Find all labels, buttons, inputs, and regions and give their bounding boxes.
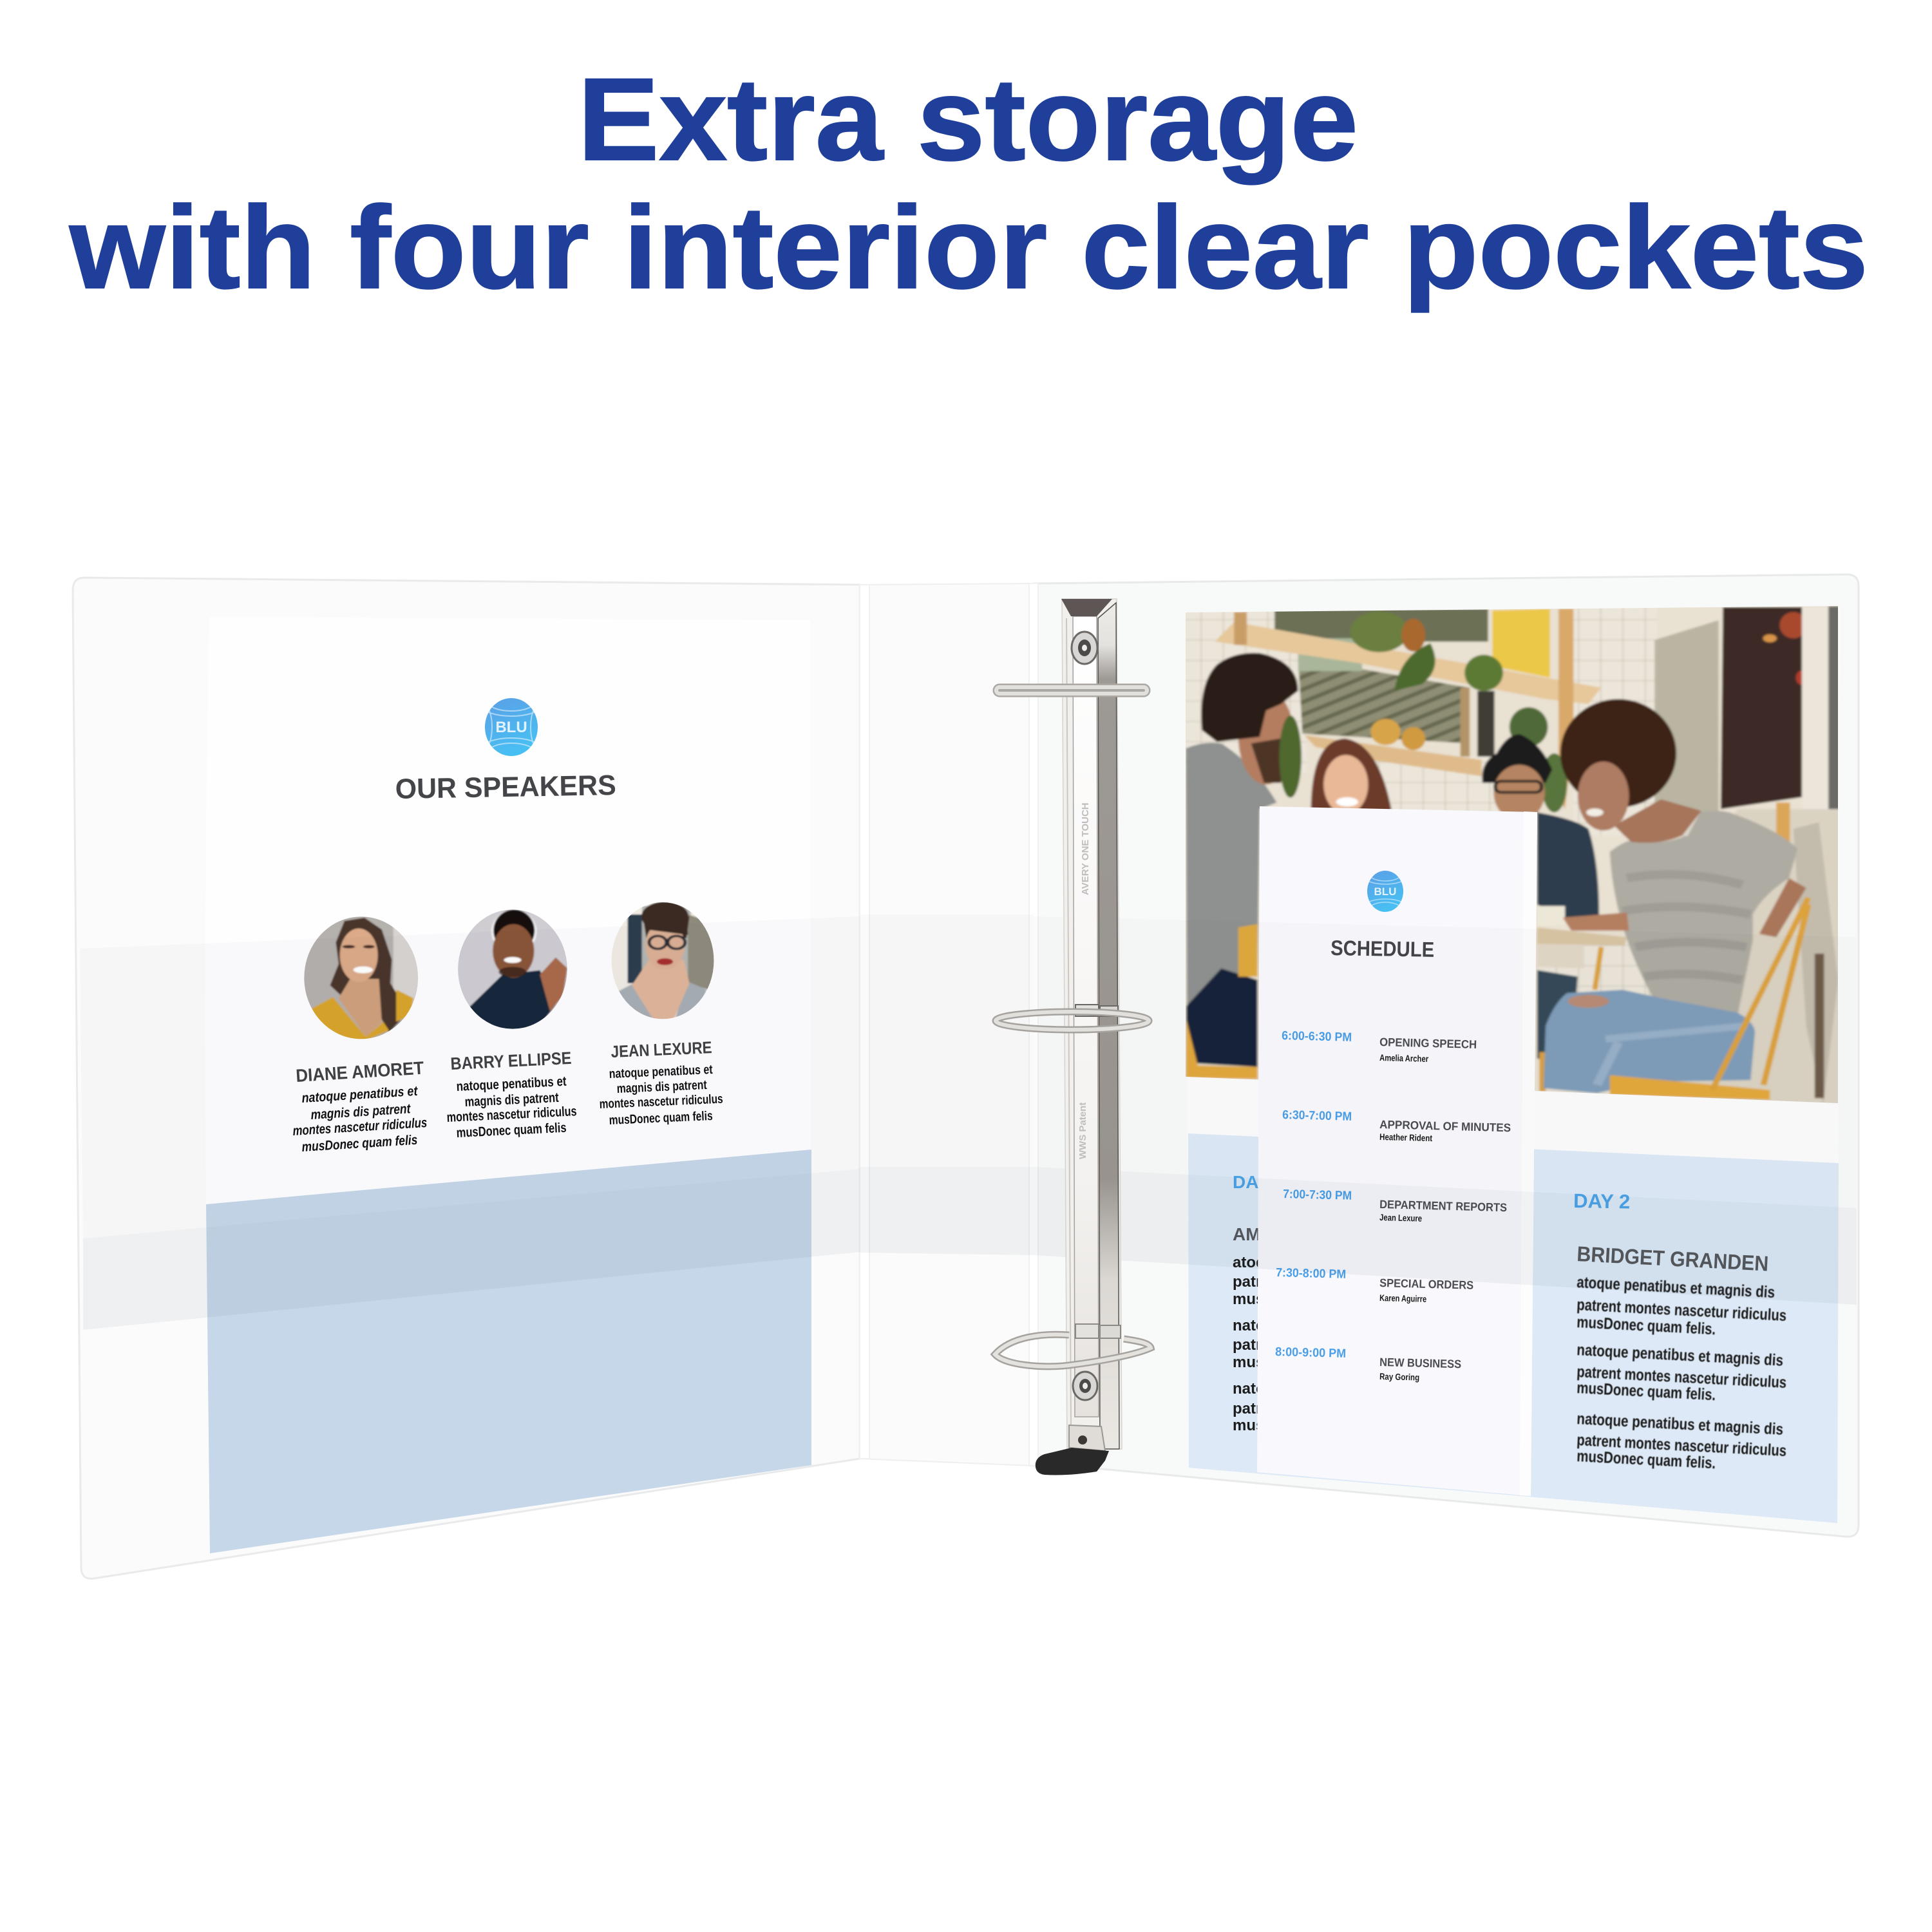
screw top	[1072, 632, 1097, 664]
blue footer panel	[1188, 1133, 1839, 1523]
photo: Diane	[301, 914, 422, 1043]
speaker: Diane Amoret: magnis dis patrent	[310, 1101, 412, 1122]
schedule sessions: SPECIAL ORDERS	[1379, 1276, 1473, 1292]
pocket seams	[860, 583, 1038, 1466]
Day 2 column	[1573, 1189, 1787, 1472]
rail imprint: AVERY ONE TOUCH	[1080, 802, 1091, 895]
left man	[1186, 743, 1276, 1008]
binder	[73, 574, 1862, 1578]
panel: right cover	[1034, 574, 1859, 1537]
card paper	[1257, 806, 1537, 1496]
Day 1 column: DA	[1233, 1172, 1258, 1192]
speaker: Diane Amoret	[292, 1058, 428, 1155]
Day 1 column: patr	[1233, 1336, 1262, 1354]
Day 2 column: natoque penatibus et magnis dis	[1577, 1341, 1784, 1370]
speaker: Jean Lexure: natoque penatibus et	[609, 1063, 713, 1081]
photo: Jean	[612, 902, 714, 1019]
speaker: Barry Ellipse: musDonec quam felis	[456, 1121, 567, 1141]
rail imprint	[1077, 802, 1091, 1159]
schedule sessions: OPENING SPEECH	[1379, 1036, 1477, 1051]
center woman	[1311, 739, 1392, 813]
infographic canvas	[68, 79, 1864, 1580]
speaker: Jean Lexure: musDonec quam felis	[609, 1109, 713, 1128]
clear pocket overlays	[80, 914, 1857, 1330]
schedule sessions: DEPARTMENT REPORTS	[1379, 1198, 1507, 1214]
heading: schedule: SCHEDULE	[1331, 936, 1434, 961]
schedule times: 7:30-8:00 PM	[1276, 1266, 1346, 1282]
lever bracket	[1069, 1425, 1105, 1451]
rail channel	[1073, 616, 1099, 1417]
card edge	[1520, 811, 1537, 1496]
sheet paper	[1186, 606, 1840, 1523]
schedule times: 7:00-7:30 PM	[1283, 1188, 1352, 1203]
speaker: Barry Ellipse: magnis dis patrent	[464, 1090, 559, 1110]
Day 2 column: musDonec quam felis.	[1577, 1447, 1716, 1472]
schedule times: 8:00-9:00 PM	[1275, 1345, 1346, 1361]
Day 2 column: patrent montes nascetur ridiculus	[1577, 1431, 1787, 1460]
Day 2 column: patrent montes nascetur ridiculus	[1577, 1296, 1787, 1325]
schedule presenters: Karen Aguirre	[1379, 1293, 1426, 1304]
ring mechanism	[995, 599, 1151, 1475]
speaker: Diane Amoret: DIANE AMORET	[295, 1058, 424, 1086]
ring middle	[996, 1005, 1149, 1030]
speaker: Diane Amoret: natoque penatibus et	[301, 1084, 419, 1106]
schedule sessions: APPROVAL OF MINUTES	[1379, 1118, 1511, 1134]
title: with four interior clear pockets	[69, 182, 1868, 313]
rail plate	[1062, 599, 1122, 1449]
schedule presenters	[1379, 1052, 1433, 1383]
logo: BLU: BLU	[1374, 886, 1396, 898]
ring bottom	[995, 1324, 1151, 1367]
speaker: Barry Ellipse	[446, 1048, 577, 1141]
schedule presenters: Amelia Archer	[1379, 1052, 1429, 1064]
Day 2 column: patrent montes nascetur ridiculus	[1577, 1363, 1787, 1392]
schedule times: 6:30-7:00 PM	[1282, 1108, 1352, 1124]
screw bottom	[1073, 1372, 1097, 1400]
Day 2 column: natoque penatibus et magnis dis	[1577, 1410, 1784, 1439]
schedule card	[1257, 806, 1537, 1496]
speaker: Jean Lexure: magnis dis patrent	[616, 1078, 707, 1096]
blue footer panel	[206, 1150, 811, 1553]
speaker: Jean Lexure: JEAN LEXURE	[611, 1037, 712, 1061]
schedule sessions	[1379, 1036, 1511, 1370]
panel: spine	[860, 583, 1034, 1466]
ring top	[996, 687, 1147, 694]
photo: Barry	[458, 909, 567, 1029]
right woman	[1610, 811, 1797, 1014]
heading: our speakers: OUR SPEAKERS	[395, 770, 616, 805]
speaker: Barry Ellipse: natoque penatibus et	[456, 1074, 567, 1094]
panel: left cover	[73, 578, 860, 1578]
rail dark side	[1098, 603, 1119, 1449]
rail imprint: WWS Patent	[1077, 1103, 1088, 1159]
Day 2 column: BRIDGET GRANDEN	[1577, 1242, 1769, 1276]
speaker: Jean Lexure	[599, 1037, 723, 1128]
speaker: Diane Amoret: musDonec quam felis	[301, 1133, 418, 1155]
Day 2 column: DAY 2	[1573, 1189, 1630, 1213]
Day 1 column: nato	[1233, 1317, 1265, 1334]
Day 1 column: mus	[1233, 1291, 1264, 1308]
Day 2 column: atoque penatibus et magnis dis	[1577, 1273, 1776, 1302]
Day 1 column: patr	[1233, 1273, 1262, 1291]
schedule sessions: NEW BUSINESS	[1379, 1356, 1461, 1370]
rail top cap	[1061, 599, 1112, 616]
Day 1 column: mus	[1233, 1417, 1264, 1434]
speaker: Jean Lexure: montes nascetur ridiculus	[599, 1092, 723, 1112]
speaker: Barry Ellipse: BARRY ELLIPSE	[450, 1048, 572, 1074]
Day 1 column	[1233, 1172, 1265, 1434]
left sheet: our speakers	[205, 617, 811, 1553]
photo: cafe scene	[1179, 599, 1862, 1124]
title: Extra storage	[578, 53, 1358, 185]
rail flange line	[1066, 618, 1071, 1426]
Day 1 column: AM	[1233, 1224, 1261, 1244]
hat man	[1537, 813, 1599, 919]
schedule times	[1275, 1029, 1352, 1361]
schedule presenters: Ray Goring	[1379, 1371, 1419, 1383]
schedule presenters: Heather Rident	[1379, 1132, 1433, 1143]
speaker: Barry Ellipse: montes nascetur ridiculus	[446, 1104, 577, 1125]
Day 1 column: patr	[1233, 1400, 1262, 1417]
sheet paper	[205, 617, 811, 1206]
schedule times: 6:00-6:30 PM	[1282, 1029, 1352, 1045]
speaker: Diane Amoret: montes nascetur ridiculus	[292, 1115, 428, 1139]
schedule presenters: Jean Lexure	[1379, 1212, 1422, 1224]
Day 1 column: nato	[1233, 1380, 1265, 1397]
lever: black tab	[1036, 1448, 1109, 1475]
logo: BLU	[485, 698, 538, 756]
Day 1 column: atoq	[1233, 1254, 1265, 1271]
Day 2 column: musDonec quam felis.	[1577, 1379, 1716, 1404]
right sheet: agenda	[1179, 599, 1862, 1523]
Day 1 column: mus	[1233, 1354, 1264, 1371]
table	[1537, 927, 1627, 945]
logo: BLU: BLU	[495, 719, 527, 736]
title	[69, 53, 1868, 313]
logo: BLU	[1367, 871, 1403, 912]
Day 2 column: musDonec quam felis.	[1577, 1313, 1716, 1338]
